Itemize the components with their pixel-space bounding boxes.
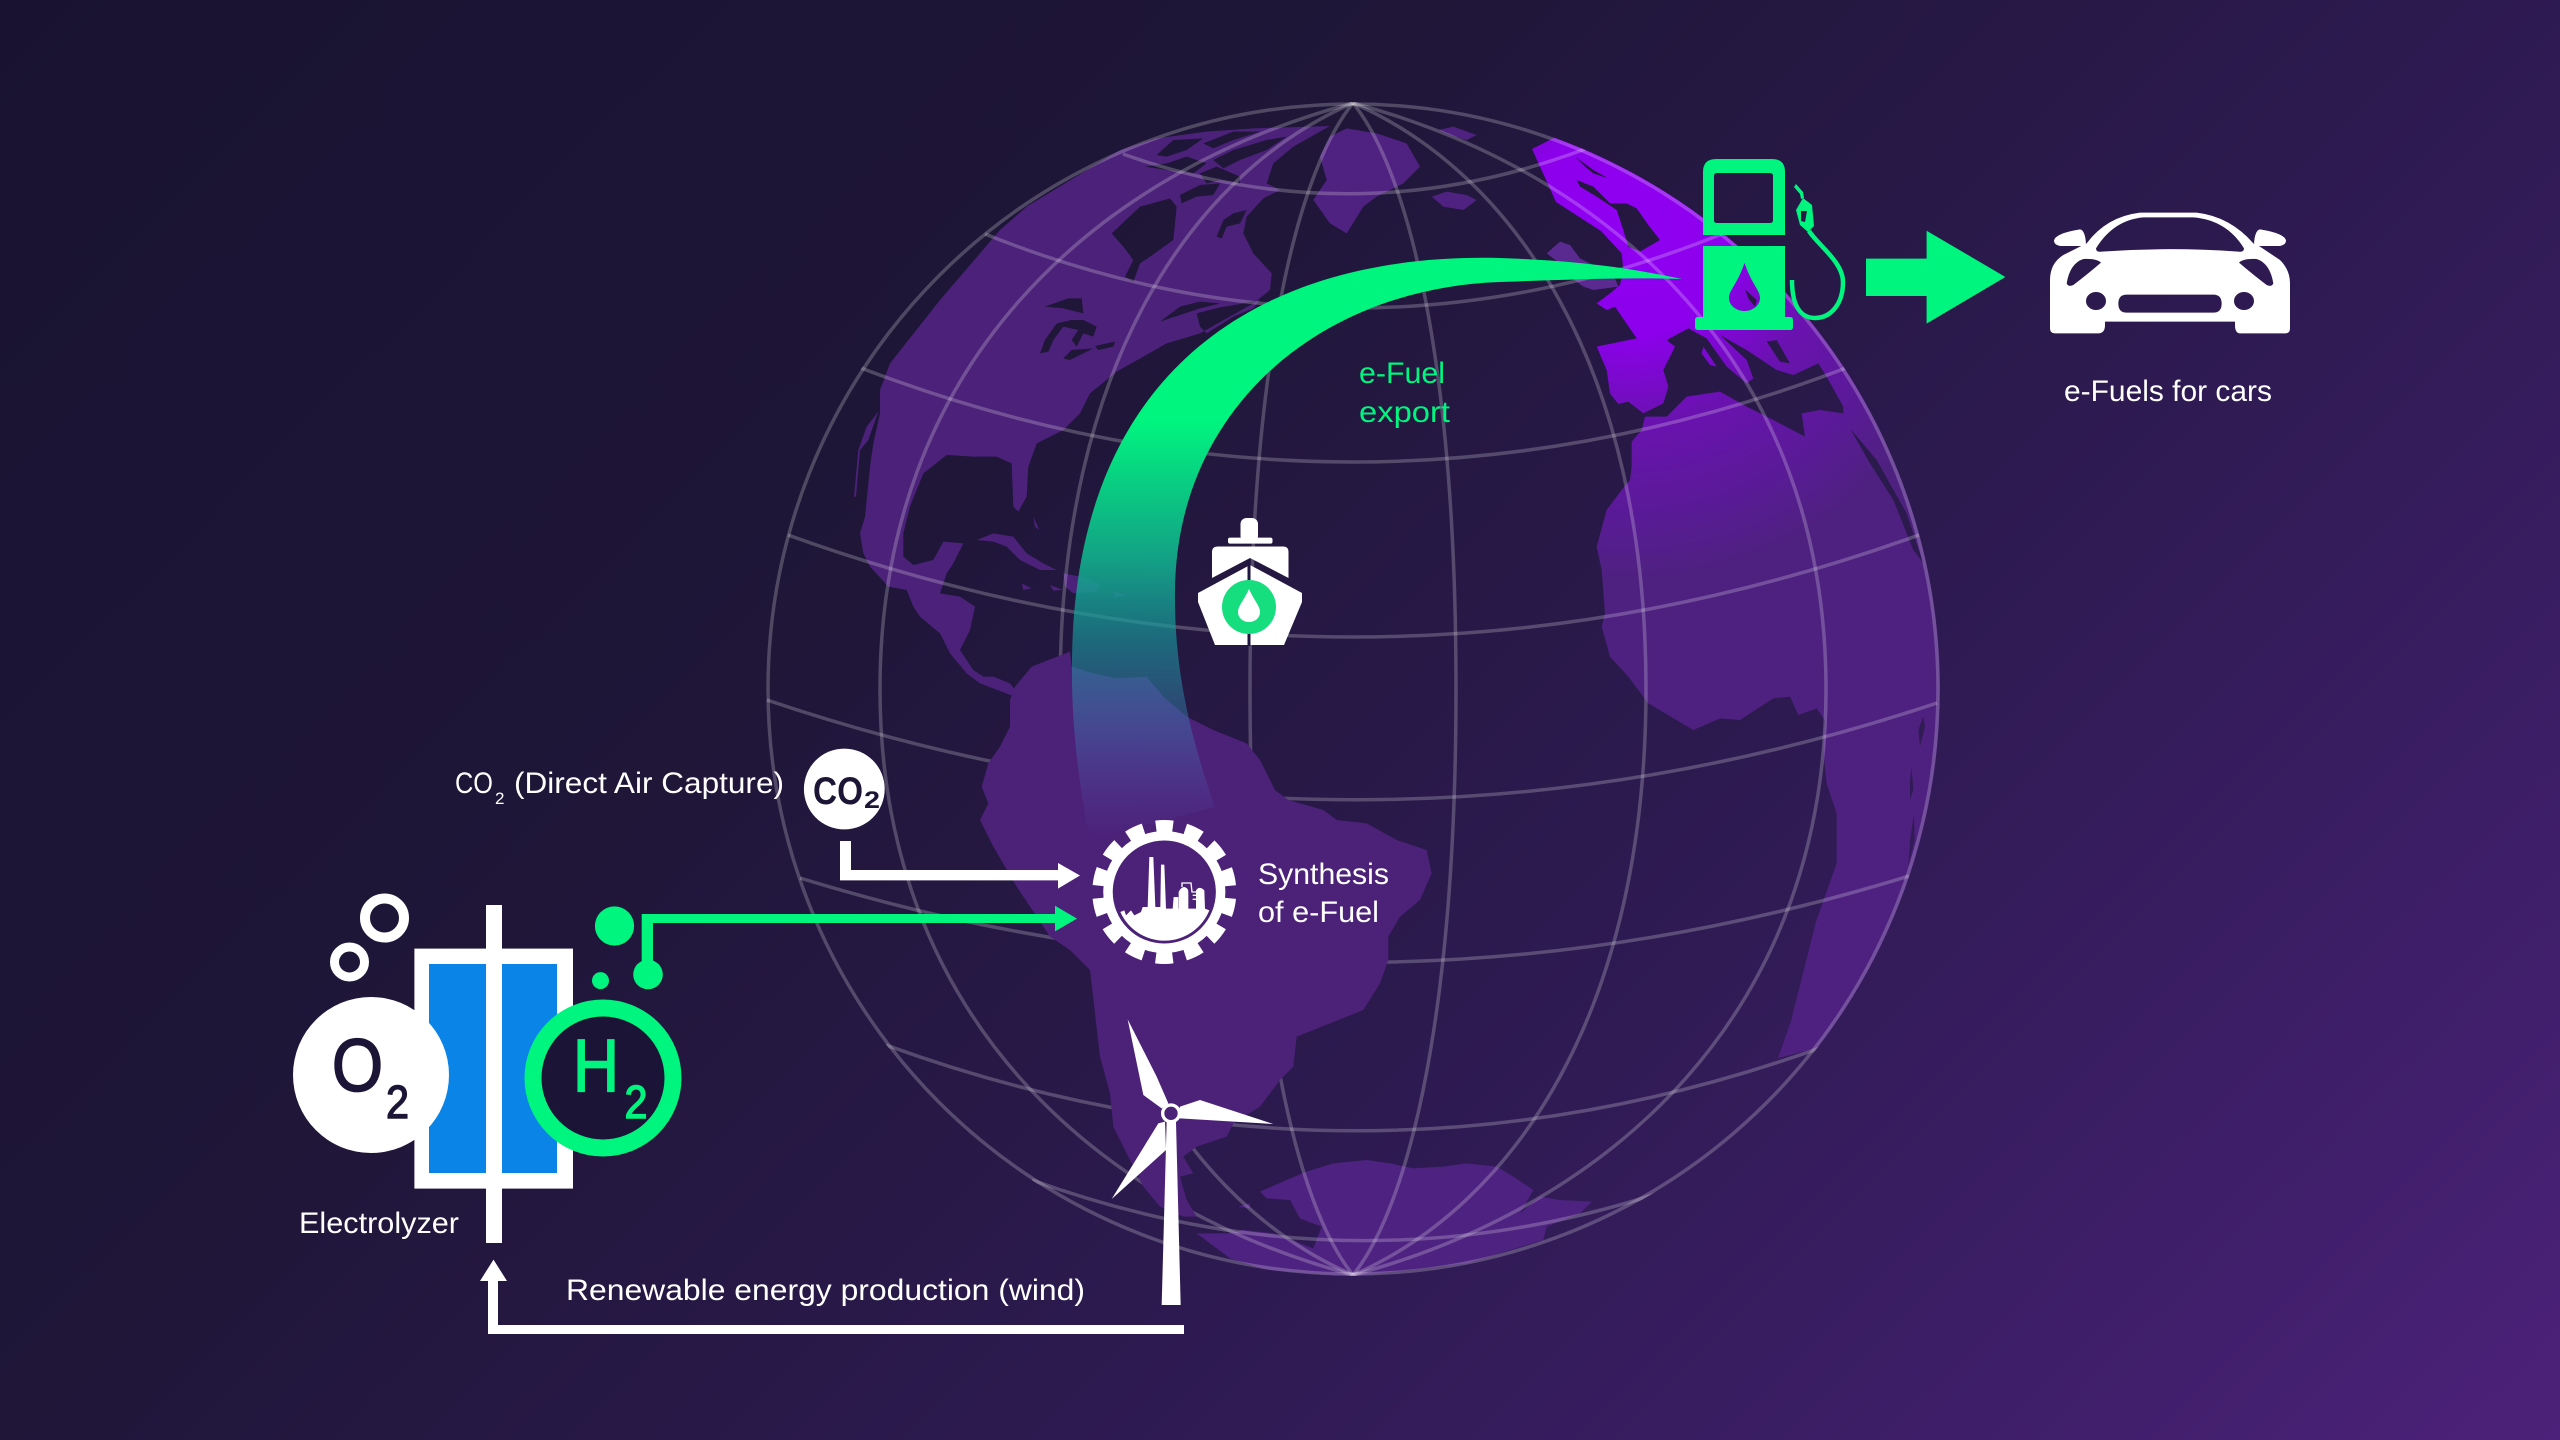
arrow: CO2 to synthesis <box>840 841 1080 889</box>
icon: CO2 circle: CO <box>813 770 863 813</box>
icon: synthesis gear with factory <box>1098 826 1230 958</box>
icon: CO2 circle <box>804 749 885 829</box>
icon: fuel pump <box>1695 159 1843 330</box>
icon: oxygen bubbles: O <box>332 1024 383 1107</box>
icon: oxygen bubbles: 2 <box>386 1076 409 1128</box>
text: CO2 (Direct Air Capture) <box>455 767 784 808</box>
text: Electrolyzer: Electrolyzer <box>299 1207 459 1240</box>
text: e-Fuel export <box>1359 357 1451 429</box>
text: Renewable energy production (wind): Renewable energy production (wind) <box>566 1274 1085 1307</box>
icon: hydrogen bubbles: H <box>573 1024 619 1107</box>
text: CO2 (Direct Air Capture): 2 <box>495 789 504 808</box>
arrow: hydrogen to synthesis <box>642 906 1077 965</box>
icon: hydrogen bubbles <box>533 906 673 1148</box>
icon: CO2 circle: 2 <box>864 787 880 814</box>
icon: electrolyzer <box>414 905 573 1243</box>
text: CO2 (Direct Air Capture): (Direct Air Capture) <box>514 767 784 800</box>
icon: hydrogen bubbles: 2 <box>624 1076 648 1128</box>
icon: oxygen bubbles <box>293 898 449 1153</box>
land: baja california <box>854 412 878 497</box>
text: Synthesis of e-Fuel: Synthesis <box>1258 858 1389 891</box>
icon: ship <box>1198 518 1302 646</box>
text: e-Fuel export: e-Fuel <box>1359 357 1445 390</box>
land: europe, africa, asia <box>1532 138 1940 1058</box>
land: north america <box>854 126 1330 700</box>
icon: wind turbine <box>1112 1019 1273 1305</box>
text: e-Fuel export: export <box>1359 396 1451 429</box>
land: british isles <box>1547 242 1618 290</box>
text: CO2 (Direct Air Capture): CO <box>455 767 493 800</box>
globe <box>767 103 2060 1277</box>
land: greenland, iceland, svalbard <box>1313 127 1477 233</box>
text: e-Fuels for cars: e-Fuels for cars <box>2064 375 2272 408</box>
icon: car <box>2050 213 2290 333</box>
land: south america <box>980 652 1432 1217</box>
text: Synthesis of e-Fuel <box>1258 858 1389 929</box>
land: antarctica <box>1197 1160 1592 1277</box>
arrow: e-fuel export swoosh <box>1072 258 1682 840</box>
arrow: pump to car <box>1866 231 2005 324</box>
land: caribbean islands <box>977 517 1127 597</box>
globe grid: meridians and parallels <box>767 103 1938 1275</box>
arrow: wind energy to electrolyzer <box>480 1260 1184 1334</box>
text: Synthesis of e-Fuel: of e-Fuel <box>1258 896 1379 929</box>
